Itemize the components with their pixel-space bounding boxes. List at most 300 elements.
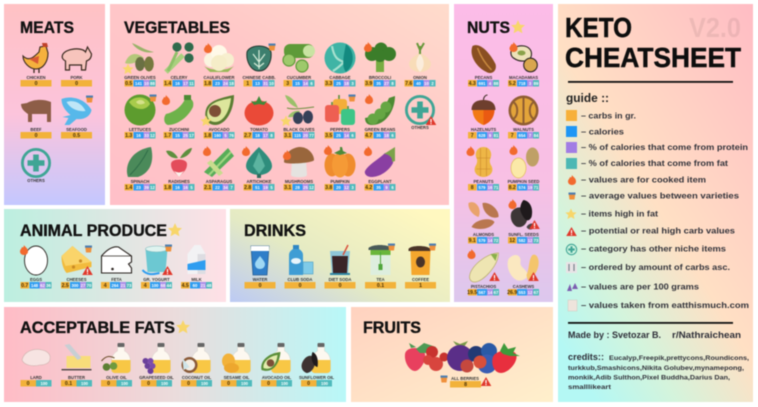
item: sunflower seeds: 73 — [534, 238, 539, 243]
item: feta: FETA — [111, 277, 122, 282]
item: pecans: PECANS — [475, 75, 492, 80]
item: almonds: 9.1 — [469, 238, 476, 244]
item: cheeses: 300 — [72, 283, 79, 288]
item: hazelnuts: 81 — [494, 133, 499, 138]
item: radishes — [164, 148, 194, 191]
item: celery: 17 — [183, 81, 188, 86]
item: gr. yogurt: 4 — [144, 283, 147, 289]
item: pumpkin seed: 71 — [534, 185, 539, 190]
credits: Eucalyp,Freepik,prettycons,Roundicons, — [609, 355, 749, 362]
bar: all berries: 8 — [464, 382, 467, 388]
item: tomato — [244, 96, 274, 139]
item: peppers: 25 — [336, 133, 341, 138]
item: beef — [20, 100, 52, 139]
item: butter: BUTTER — [68, 375, 85, 380]
item: broccoli: 35 — [376, 81, 381, 86]
item: sunflower seeds: 12 — [509, 238, 515, 244]
item: milk: MILK — [191, 277, 202, 282]
item: chinese cabbage: 1 — [246, 81, 249, 87]
item: eggplant: 9 — [385, 185, 388, 190]
item: artichoke: ARTICHOKE — [247, 179, 272, 184]
item: eggs: 148 — [31, 283, 39, 288]
item: black olives: 20 — [303, 133, 308, 138]
panel: animal produce — [4, 209, 226, 302]
panel: drinks — [230, 209, 450, 302]
acceptable fats background — [4, 307, 346, 402]
item: sunflower oil: 0 — [307, 381, 310, 387]
item: pecans: 4 — [489, 81, 492, 86]
item: lard: LARD — [30, 375, 42, 380]
item: tomato: 2.7 — [244, 133, 251, 139]
item: lettuces: LETTUCES — [129, 127, 151, 132]
item: almonds — [468, 202, 499, 244]
item: cabbage: 25 — [336, 81, 341, 86]
item: lettuces: 33 — [144, 133, 149, 138]
heading: fruits: FRUITS — [363, 318, 421, 337]
item: grapeseed oil: 0 — [147, 381, 150, 387]
item: spinach — [124, 147, 156, 191]
item: cashews: 26.9 — [507, 290, 517, 296]
item: onion: 2 — [431, 81, 434, 86]
item: grapeseed oil: GRAPESEED OIL — [139, 375, 174, 380]
drinks background — [230, 209, 450, 302]
item: mushrooms: MUSHROOMS — [285, 179, 313, 184]
item: spinach: 39 — [144, 185, 149, 190]
item: pumpkin: 3.8 — [325, 185, 332, 191]
item: onion: 40 — [416, 81, 421, 86]
nuts background — [454, 4, 553, 302]
item: onion: 7.6 — [405, 81, 412, 87]
item: hazelnuts — [468, 95, 499, 139]
vegetables background — [110, 4, 449, 205]
panel: vegetables — [110, 4, 449, 205]
item: lard — [20, 349, 52, 387]
item: cucumber: 3 — [286, 81, 289, 87]
item: peppers: 3.5 — [325, 133, 332, 139]
item: cabbage: 3 — [351, 81, 354, 86]
item: beef: BEEF — [30, 127, 42, 132]
meats background — [4, 4, 105, 205]
item: eggs: 62 — [40, 283, 45, 288]
item: avocado: 160 — [214, 133, 222, 138]
item: cucumber — [283, 44, 315, 87]
item: green olives: 141 — [135, 81, 143, 86]
item: cauliflower: 24 — [223, 81, 228, 86]
item: coffee — [405, 244, 436, 289]
credits: monkik,Adib Sulthon,Pixel Buddha,Darius Dan, — [568, 374, 730, 382]
item: pork: 0 — [75, 81, 78, 87]
item: celery: 11 — [189, 81, 194, 86]
item: sesame oil: 0 — [227, 381, 230, 387]
item: tea: TEA — [376, 277, 385, 282]
credits — [568, 352, 749, 391]
item: pistachios: 567 — [478, 290, 486, 295]
item: lettuces: 12 — [150, 133, 155, 138]
item: pork — [61, 47, 92, 87]
item: broccoli: 8 — [391, 81, 394, 86]
item: spinach: 1.4 — [125, 185, 132, 191]
item: onion: 10 — [424, 81, 429, 86]
legend: protein: – % of calories that come from protein — [581, 142, 748, 152]
item: celery: CELERY — [171, 75, 188, 80]
legend: high in fat: – items high in fat — [581, 208, 658, 218]
item: cauliflower: 1.8 — [204, 81, 211, 87]
icon: berries — [405, 341, 520, 374]
item: walnuts: 7 — [529, 133, 532, 138]
item: pistachios: 67 — [494, 290, 499, 295]
item: feta — [101, 247, 132, 289]
item: cheeses: 70 — [87, 283, 92, 288]
item: seafood: 0.5 — [73, 133, 80, 139]
item: sunflower seeds — [508, 199, 540, 244]
guide heading: guide :: — [566, 91, 609, 105]
item: pistachios: 19.5 — [467, 290, 477, 296]
legend: calories — [566, 126, 624, 137]
item: pumpkin: PUMPKIN — [330, 179, 350, 184]
item: pumpkin: 12 — [344, 185, 349, 190]
credits: smalllikeart — [568, 384, 612, 391]
icon: nuts star — [511, 20, 525, 33]
item: radishes: 5 — [190, 185, 193, 190]
item: sunflower oil: 100 — [321, 381, 329, 386]
heading: acceptable fats: ACCEPTABLE FATS — [20, 318, 175, 337]
item: asparagus — [203, 146, 234, 191]
item: cashews — [507, 255, 539, 296]
item: green olives: 0.5 — [125, 81, 132, 87]
item: mushrooms: 3.1 — [284, 185, 291, 191]
item: black olives: BLACK OLIVES — [283, 127, 315, 132]
item: olive oil — [101, 343, 132, 387]
item: chinese cabbage: 10 — [269, 81, 274, 86]
item: eggplant: 6 — [391, 185, 394, 190]
item: walnuts: WALNUTS — [513, 127, 534, 132]
item: onion — [404, 43, 436, 87]
label: all berries: ALL BERRIES — [451, 376, 479, 381]
fruits background — [351, 307, 553, 402]
item: macadamias: 89 — [534, 81, 539, 86]
item: pecans — [468, 45, 499, 87]
item: tea: 0.1 — [377, 283, 384, 289]
item: zucchini: 17 — [189, 133, 194, 138]
item: walnuts: 654 — [518, 133, 526, 138]
item: hazelnuts: 628 — [478, 133, 486, 138]
item: eggplant: 4.2 — [365, 185, 372, 191]
item: zucchini: ZUCCHINI — [169, 127, 189, 132]
item: asparagus: 2.1 — [204, 185, 211, 191]
item: milk: 4.5 — [182, 283, 189, 289]
item: macadamias: 5.2 — [509, 81, 516, 87]
item: almonds: 72 — [494, 238, 499, 243]
legend: cooked: – values are for cooked item — [581, 174, 706, 184]
item: cheeses: 27 — [81, 283, 86, 288]
item: pumpkin seed: 574 — [518, 185, 526, 190]
item: cabbage: 18 — [344, 81, 349, 86]
item: cabbage — [324, 42, 356, 87]
item: pistachios: 14 — [488, 290, 493, 295]
item: peanuts — [466, 146, 499, 191]
item: cashews: 553 — [518, 290, 526, 295]
panel: fruits — [351, 307, 553, 402]
credits: credits:: — [568, 352, 604, 362]
item: almonds: 14 — [488, 238, 493, 243]
item: milk: 60 — [193, 283, 198, 288]
item: mushrooms: 28 — [295, 185, 300, 190]
item: cashews: CASHEWS — [513, 284, 534, 289]
item: feta: 4 — [104, 283, 107, 289]
item: onion: ONION — [413, 75, 427, 80]
item: cashews: 12 — [528, 290, 533, 295]
item: cauliflower: 18 — [229, 81, 234, 86]
legend: carbs: – carbs in gr. — [581, 110, 636, 120]
item: black olives: 3.1 — [284, 133, 291, 139]
item: coconut oil — [181, 343, 212, 387]
item: asparagus: 34 — [223, 185, 228, 190]
item: almonds: ALMONDS — [473, 232, 494, 237]
item: celery: 16 — [175, 81, 180, 86]
item: peanuts: 71 — [494, 185, 499, 190]
legend: other items: – category has other niche items — [581, 244, 726, 254]
item: eggs: EGGS — [30, 277, 42, 282]
item: pumpkin seed: 8.2 — [509, 185, 516, 191]
item: olive oil: OLIVE OIL — [106, 375, 127, 380]
item: cheeses: CHEESES — [66, 277, 87, 282]
item: club soda — [284, 245, 316, 289]
item: peppers: PEPPERS — [330, 127, 350, 132]
item: seafood — [61, 96, 93, 139]
item: sunflower seeds: 582 — [518, 238, 526, 243]
item: cucumber: CUCUMBER — [287, 75, 311, 80]
item: pumpkin seed — [508, 145, 539, 191]
item: seafood: SEAFOOD — [66, 127, 87, 132]
item: radishes: 16 — [175, 185, 180, 190]
item: broccoli: 27 — [384, 81, 389, 86]
item: sesame oil: SESAME OIL — [224, 375, 250, 380]
item: macadamias: MACADAMIAS — [509, 75, 538, 80]
item: chinese cabbage — [242, 44, 276, 87]
item: green beans — [364, 94, 396, 139]
item: sunflower seeds: SUNFL. SEEDS — [508, 232, 539, 237]
author credit: r/Nathraichean — [672, 330, 741, 341]
item: cauliflower: 23 — [215, 81, 220, 86]
legend: calories: – calories — [581, 126, 624, 136]
item: green olives: 10 — [144, 81, 149, 86]
heading: nuts: NUTS — [467, 18, 510, 37]
item: chicken — [20, 43, 52, 87]
item: feta: 264 — [112, 283, 119, 288]
animal produce background — [4, 209, 226, 302]
item: club soda: CLUB SODA — [288, 277, 312, 282]
item: cauliflower — [204, 43, 234, 87]
item: tea — [365, 244, 396, 289]
item: others vegetables: OTHERS — [411, 125, 429, 130]
item: lettuces — [124, 94, 156, 139]
version label: V2.0 — [689, 12, 741, 43]
item: peanuts: 16 — [488, 185, 493, 190]
icon: animal produce star — [168, 223, 182, 236]
item: avocado oil: 100 — [281, 381, 289, 386]
item: black olives: 77 — [309, 133, 314, 138]
item: green beans: 4.7 — [365, 133, 372, 139]
item: zucchini — [162, 95, 194, 139]
item: peppers: 6 — [351, 133, 354, 138]
item: radishes: 1.8 — [164, 185, 171, 191]
item: peanuts: 8 — [471, 185, 474, 191]
item: peppers — [324, 94, 356, 139]
item: walnuts: 84 — [534, 133, 539, 138]
item: cabbage: CABBAGE — [329, 75, 351, 80]
item: broccoli: BROCCOLI — [369, 75, 391, 80]
item: avocado: 1.8 — [204, 133, 211, 139]
item: asparagus: ASPARAGUS — [206, 179, 232, 184]
item: celery — [164, 42, 194, 87]
author credit — [568, 330, 741, 341]
item: eggs: 0.7 — [21, 283, 28, 289]
author credit: Made by : Svetozar B. — [568, 330, 661, 341]
item: gr. yogurt: 44 — [167, 283, 172, 288]
item: artichoke: 2.8 — [244, 185, 251, 191]
item: green olives: GREEN OLIVES — [124, 75, 156, 80]
icon: acceptable fats star — [176, 320, 190, 333]
item: cucumber: 15 — [295, 81, 300, 86]
icon: average marker — [440, 376, 448, 382]
item: sesame oil — [221, 343, 252, 387]
item: cashews: 67 — [534, 290, 539, 295]
heading: vegetables: VEGETABLES — [124, 18, 230, 37]
item: chicken: 0 — [35, 81, 38, 87]
item: hazelnuts: 7 — [471, 133, 474, 139]
item: hazelnuts: 9 — [489, 133, 492, 138]
item: lettuces: 16 — [136, 133, 141, 138]
item: grapeseed oil — [139, 343, 174, 387]
item: others: OTHERS — [27, 178, 45, 183]
item: coffee: COFFEE — [412, 277, 429, 282]
item: gr. yogurt: 68 — [161, 283, 166, 288]
icon: warning — [481, 377, 491, 386]
heading: meats: MEATS — [20, 18, 74, 37]
item: water — [244, 246, 276, 289]
item: asparagus: 22 — [215, 185, 220, 190]
item: avocado: 76 — [229, 133, 234, 138]
item: diet soda: DIET SODA — [329, 277, 351, 282]
item: sunflower oil — [299, 343, 334, 387]
item: zucchini: 1.7 — [164, 133, 171, 139]
item: walnuts: 7 — [511, 133, 514, 139]
item: butter — [61, 344, 92, 387]
item: avocado: AVOCADO — [208, 127, 230, 132]
item: pecans: 691 — [478, 81, 486, 86]
item: artichoke — [242, 146, 274, 191]
item: pumpkin: 20 — [336, 185, 341, 190]
item: chinese cabbage: 31 — [263, 81, 268, 86]
item: pumpkin seed: 19 — [528, 185, 533, 190]
item: butter: 0.1 — [65, 381, 72, 387]
item: feta: 21 — [121, 283, 126, 288]
item: cucumber: 14 — [303, 81, 308, 86]
item: avocado: 5 — [224, 133, 227, 138]
item: cheeses: 2.5 — [62, 283, 69, 289]
item: artichoke: 5 — [270, 185, 273, 190]
item: all berries — [405, 341, 520, 388]
item: butter: 100 — [81, 381, 89, 386]
heading: drinks: DRINKS — [244, 221, 306, 240]
item: avocado — [200, 95, 234, 139]
title: cheatsheet: CHEATSHEET — [565, 42, 741, 73]
legend: average: – average values between varieties — [581, 190, 739, 200]
item: walnuts — [508, 96, 539, 139]
item: beef: 0 — [35, 133, 38, 139]
item: zucchini: 15 — [175, 133, 180, 138]
item: avocado oil: AVOCADO OIL — [262, 375, 292, 380]
item: gr. yogurt: GR. YOGURT — [143, 277, 170, 282]
keto background — [558, 4, 753, 402]
item: sesame oil: 100 — [241, 381, 249, 386]
item: cheeses — [61, 246, 93, 289]
item: olive oil: 100 — [121, 381, 129, 386]
item: pistachios — [467, 249, 500, 296]
item: pumpkin — [324, 145, 356, 191]
panel: acceptable fats — [4, 307, 346, 402]
item: macadamias — [508, 42, 539, 87]
panel: nuts — [454, 4, 553, 302]
item: pumpkin: 3 — [351, 185, 354, 190]
item: diet soda: 0 — [339, 283, 342, 289]
item: club soda: 0 — [299, 283, 302, 289]
item: tomato: 17 — [263, 133, 268, 138]
panel: meats — [4, 4, 105, 205]
item: gr. yogurt — [141, 244, 173, 289]
item: lettuces: 1.3 — [125, 133, 132, 139]
item: cauliflower: CAULIFLOWER — [204, 75, 234, 80]
heading: animal produce: ANIMAL PRODUCE — [20, 221, 167, 240]
legend: carbs — [566, 110, 636, 121]
item: mushrooms: 12 — [309, 185, 314, 190]
item: green beans: GREEN BEANS — [365, 127, 396, 132]
item: macadamias: 3 — [529, 81, 532, 86]
item: green beans: 35 — [376, 133, 381, 138]
item: broccoli — [364, 42, 396, 87]
item: coffee: 1 — [419, 283, 422, 289]
item: radishes: RADISHES — [168, 179, 190, 184]
item: cucumber: 6 — [310, 81, 313, 86]
item: tomato: 8 — [270, 133, 273, 138]
item: spinach: 23 — [136, 185, 141, 190]
item: water: 0 — [259, 283, 262, 289]
legend: high carb: – potential or real high carb values — [581, 226, 735, 236]
item: peanuts: PEANUTS — [473, 179, 494, 184]
item: pistachios: PISTACHIOS — [471, 284, 496, 289]
legend: eatthismuch: – values taken from eatthismuch.com — [581, 300, 749, 310]
item: feta: 73 — [127, 283, 132, 288]
item: others vegetables — [406, 96, 436, 130]
item: celery: 1.4 — [164, 81, 171, 87]
item: others — [22, 149, 50, 183]
item: macadamias: 718 — [518, 81, 526, 86]
item: green beans: 18 — [384, 133, 389, 138]
item: eggplant: 35 — [376, 185, 381, 190]
legend: ordered: – ordered by amount of carbs asc. — [581, 262, 730, 272]
item: coconut oil: 100 — [201, 381, 209, 386]
item: tomato: TOMATO — [250, 127, 269, 132]
item: green beans: 6 — [391, 133, 394, 138]
item: chinese cabbage: 13 — [255, 81, 260, 86]
item: milk: 48 — [207, 283, 212, 288]
item: spinach: SPINACH — [131, 179, 149, 184]
item: milk — [181, 245, 212, 289]
item: mushrooms: 25 — [303, 185, 308, 190]
item: zucchini: 25 — [183, 133, 188, 138]
item: spinach: 12 — [150, 185, 155, 190]
credits: turkkub,Smashicons,Nikita Golubev,mynamepong, — [568, 365, 744, 372]
